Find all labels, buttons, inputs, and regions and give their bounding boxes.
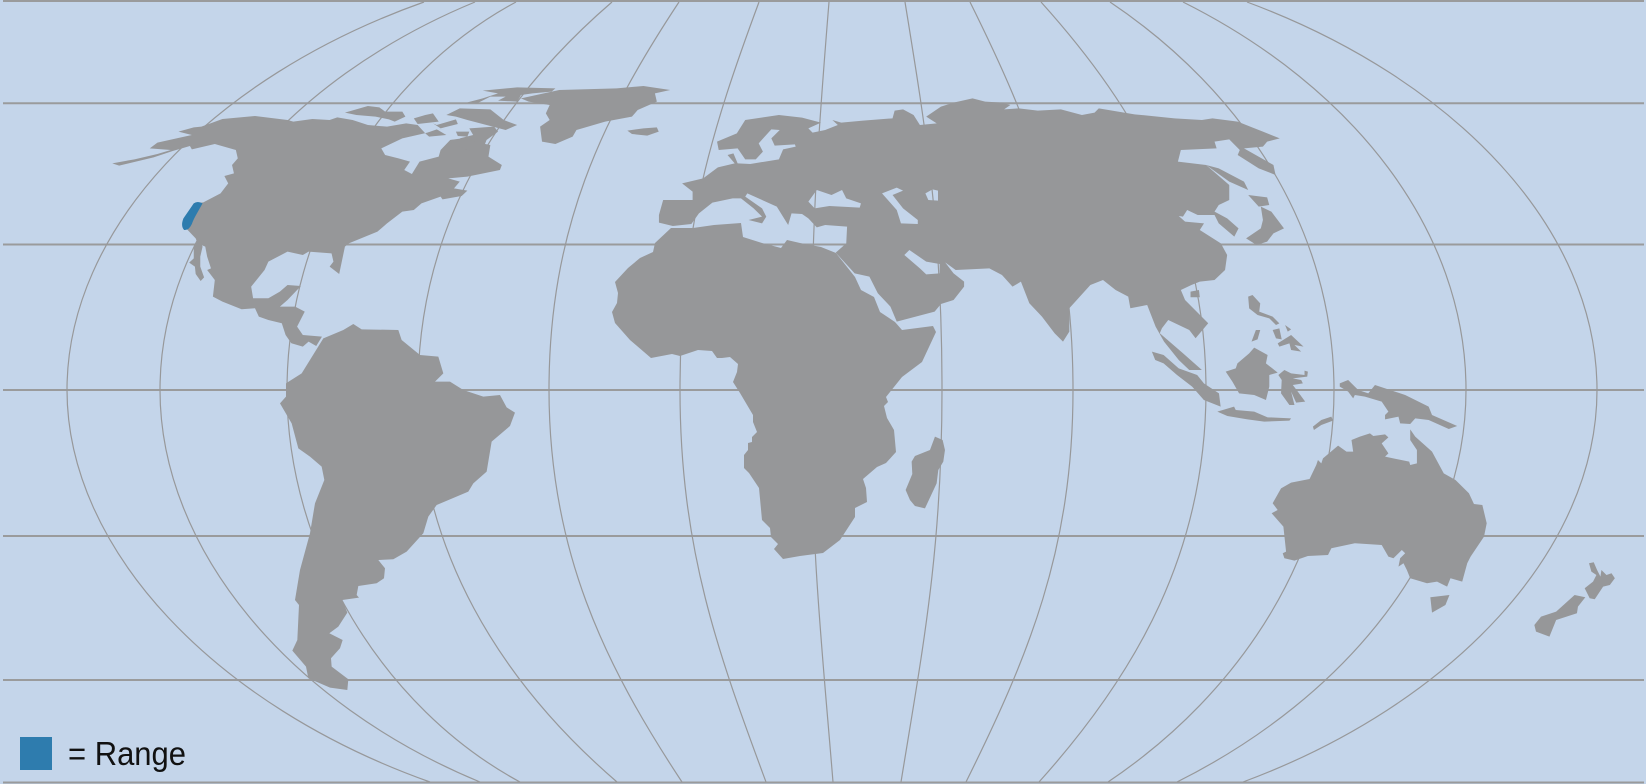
legend swatch	[20, 737, 52, 770]
Africa	[612, 223, 936, 559]
South America	[280, 324, 515, 690]
North America and Greenland	[112, 86, 670, 347]
land masses	[112, 86, 1615, 690]
Eurasia	[659, 98, 1284, 370]
legend label: = Range	[68, 735, 186, 772]
Southeast Asia, Australia and New Zealand	[1152, 295, 1615, 637]
Madagascar	[906, 437, 945, 508]
legend	[20, 735, 186, 772]
range area on the Pacific coast of North America	[182, 202, 203, 230]
